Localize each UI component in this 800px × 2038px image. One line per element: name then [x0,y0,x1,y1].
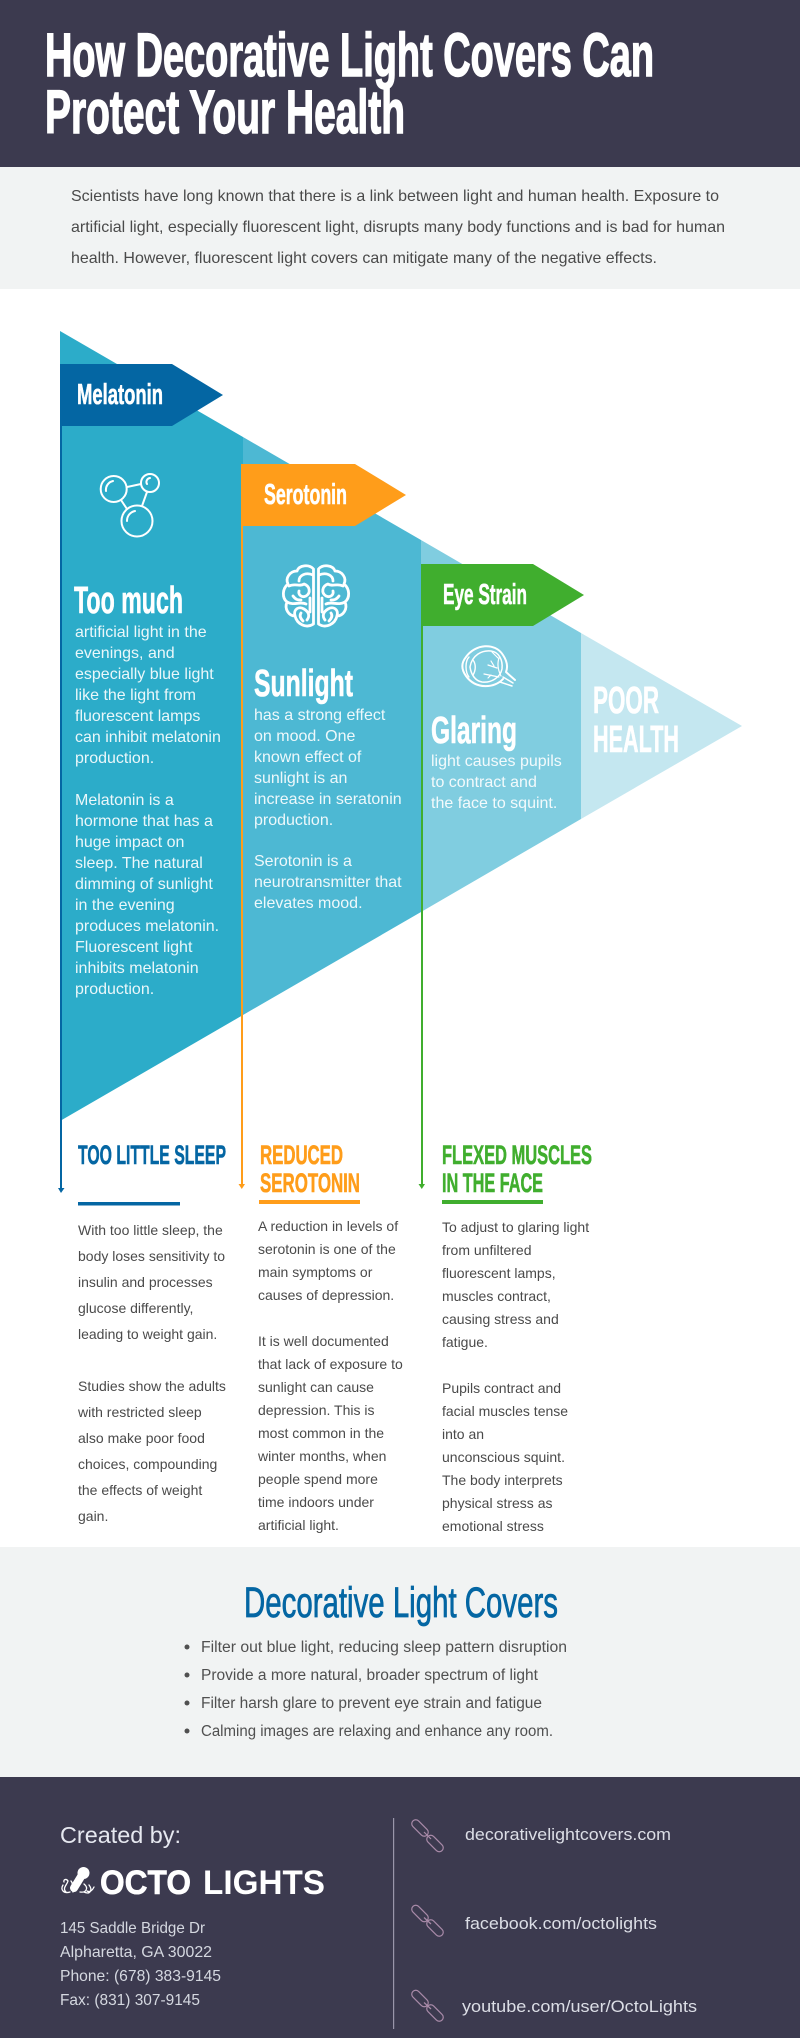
address [60,1920,221,2009]
text: too much: huge impact on [75,834,184,851]
text: too much: especially blue light [75,666,214,683]
text: too much: produces melatonin. [75,918,219,935]
address: Fax: (831) 307-9145 [60,1992,200,2009]
text: glaring: light causes pupils [431,753,562,770]
column: too little sleep [77,1140,226,1524]
body: body loses sensitivity to [78,1248,225,1264]
body: winter months, when [257,1448,386,1464]
body: Pupils contract and [442,1380,561,1396]
text: glaring: to contract and [431,774,537,791]
label: poor health: POOR [593,680,659,722]
flag: serotonin [241,464,406,526]
address: 145 Saddle Bridge Dr [60,1920,206,1937]
logo: octo lights [62,1864,325,1902]
body [257,1218,403,1533]
benefit list [184,1639,567,1740]
band: eye strain [421,540,581,912]
text: too much: Melatonin is a [75,792,174,809]
arrow: serotonin [238,520,245,1189]
logo: octo lights: LIGHTS [203,1864,325,1902]
body: most common in the [258,1425,384,1441]
triangle chart [58,331,742,1193]
text: too much: in the evening [75,897,175,914]
intro panel [0,167,800,289]
title banner [0,0,800,167]
text: too much: evenings, and [75,645,175,662]
body: fatigue. [442,1334,488,1350]
icon: link 3 [410,1989,445,2023]
text: sunlight: elevates mood. [254,895,363,912]
body: fluorescent lamps, [442,1265,556,1281]
heading: SEROTONIN [260,1168,360,1198]
body: main symptoms or [258,1264,373,1280]
heading: TOO LITTLE SLEEP [78,1140,226,1170]
text: sunlight [254,663,402,912]
text: too much: Fluorescent light [75,939,193,956]
body: It is well documented [258,1333,389,1349]
intro text: Scientists have long known that there is a link between light and human health. Exposure to [71,188,719,205]
body: with restricted sleep [77,1404,202,1420]
logo: octo lights: OCTO [100,1864,191,1902]
title [45,21,654,146]
icon: molecule [101,474,159,536]
body: artificial light. [258,1517,339,1533]
body: leading to weight gain. [78,1326,217,1342]
body [442,1219,589,1534]
text: sunlight: sunlight is an [254,770,347,787]
body: muscles contract, [442,1288,551,1304]
body: serotonin is one of the [258,1241,396,1257]
arrow: eye strain [418,620,425,1189]
flag: eye strain: Eye Strain [443,579,527,611]
body: that lack of exposure to [258,1356,403,1372]
text: too much: fluorescent lamps [75,708,200,725]
heading: IN THE FACE [442,1168,543,1198]
body: facial muscles tense [442,1403,568,1419]
body: people spend more [258,1471,378,1487]
column: reduced serotonin [257,1140,403,1533]
body: The body interprets [442,1472,563,1488]
benefit list: Filter out blue light, reducing sleep pattern disruption [201,1639,567,1656]
link text 3: youtube.com/user/OctoLights [462,1997,697,2016]
body: causing stress and [442,1311,559,1327]
heading: Decorative Light Covers [244,1579,558,1627]
body: A reduction in levels of [258,1218,398,1234]
heading [442,1140,592,1198]
body: also make poor food [78,1430,205,1446]
text: too much: Too much [74,580,183,622]
text: glaring: Glaring [431,710,517,752]
text: too much: like the light from [75,687,196,704]
text: too much: production. [75,750,154,767]
body: To adjust to glaring light [442,1219,589,1235]
intro text [71,188,725,267]
text: sunlight: has a strong effect [254,707,386,724]
text: too much: artificial light in the [75,624,207,641]
body: into an [442,1426,484,1442]
text: too much: inhibits melatonin [75,960,199,977]
text: glaring [431,710,562,812]
footer [0,1777,800,2038]
text: sunlight: Sunlight [254,663,353,705]
body: Studies show the adults [78,1378,226,1394]
icon: link 2 [410,1904,445,1938]
body: unconscious squint. [442,1449,565,1465]
band: melatonin [60,331,243,1121]
label: poor health [593,680,679,761]
text: sunlight: Serotonin is a [254,853,352,870]
body: sunlight can cause [258,1379,374,1395]
label: poor health: HEALTH [593,719,679,761]
heading: FLEXED MUSCLES [442,1140,592,1170]
text: glaring: the face to squint. [431,795,557,812]
benefit list: Filter harsh glare to prevent eye strain and fatigue [201,1695,542,1712]
flag: eye strain [421,564,584,626]
body: from unfiltered [442,1242,531,1258]
created by: Created by: [60,1822,181,1848]
benefit list: Calming images are relaxing and enhance any room. [201,1723,553,1740]
body: choices, compounding [78,1456,217,1472]
flag: melatonin [60,364,223,426]
benefit list: Provide a more natural, broader spectrum of light [201,1667,539,1684]
address: Phone: (678) 383-9145 [60,1968,221,1985]
heading [260,1140,360,1198]
text: sunlight: on mood. One [254,728,356,745]
link text 1: decorativelightcovers.com [465,1825,671,1844]
intro text: artificial light, especially fluorescent light, disrupts many body functions and is bad for human [71,219,725,236]
text: too much: can inhibit melatonin [75,729,221,746]
body [77,1222,226,1524]
column: flexed muscles [442,1140,592,1534]
body: causes of depression. [258,1287,394,1303]
flag: melatonin: Melatonin [77,379,163,411]
text: sunlight: increase in seratonin [254,791,402,808]
text: too much: sleep. The natural [75,855,203,872]
body: the effects of weight [78,1482,202,1498]
panel: decorative light covers [0,1547,800,1777]
icon: link 1 [410,1818,445,1853]
text: too much [74,580,221,998]
heading: REDUCED [260,1140,343,1170]
text: sunlight: neurotransmitter that [254,874,402,891]
body: With too little sleep, the [78,1222,223,1238]
text: too much: production. [75,981,154,998]
arrow: melatonin [58,420,64,1193]
link text 2: facebook.com/octolights [465,1914,657,1933]
text: too much: hormone that has a [75,813,213,830]
flag: serotonin: Serotonin [264,479,347,511]
body: emotional stress [442,1518,544,1534]
body: physical stress as [442,1495,552,1511]
address: Alpharetta, GA 30022 [60,1944,212,1961]
intro text: health. However, fluorescent light covers can mitigate many of the negative effects. [71,250,657,267]
text: sunlight: production. [254,812,333,829]
body: gain. [78,1508,108,1524]
text: sunlight: known effect of [254,749,362,766]
body: glucose differently, [78,1300,193,1316]
text: too much: dimming of sunlight [75,876,213,893]
body: insulin and processes [78,1274,213,1290]
body: time indoors under [258,1494,374,1510]
band: serotonin [243,437,421,1015]
band: poor health [581,633,742,819]
title: Protect Your Health [45,78,405,146]
body: depression. This is [258,1402,374,1418]
icon: brain [283,566,349,626]
icon: eye [462,646,515,686]
